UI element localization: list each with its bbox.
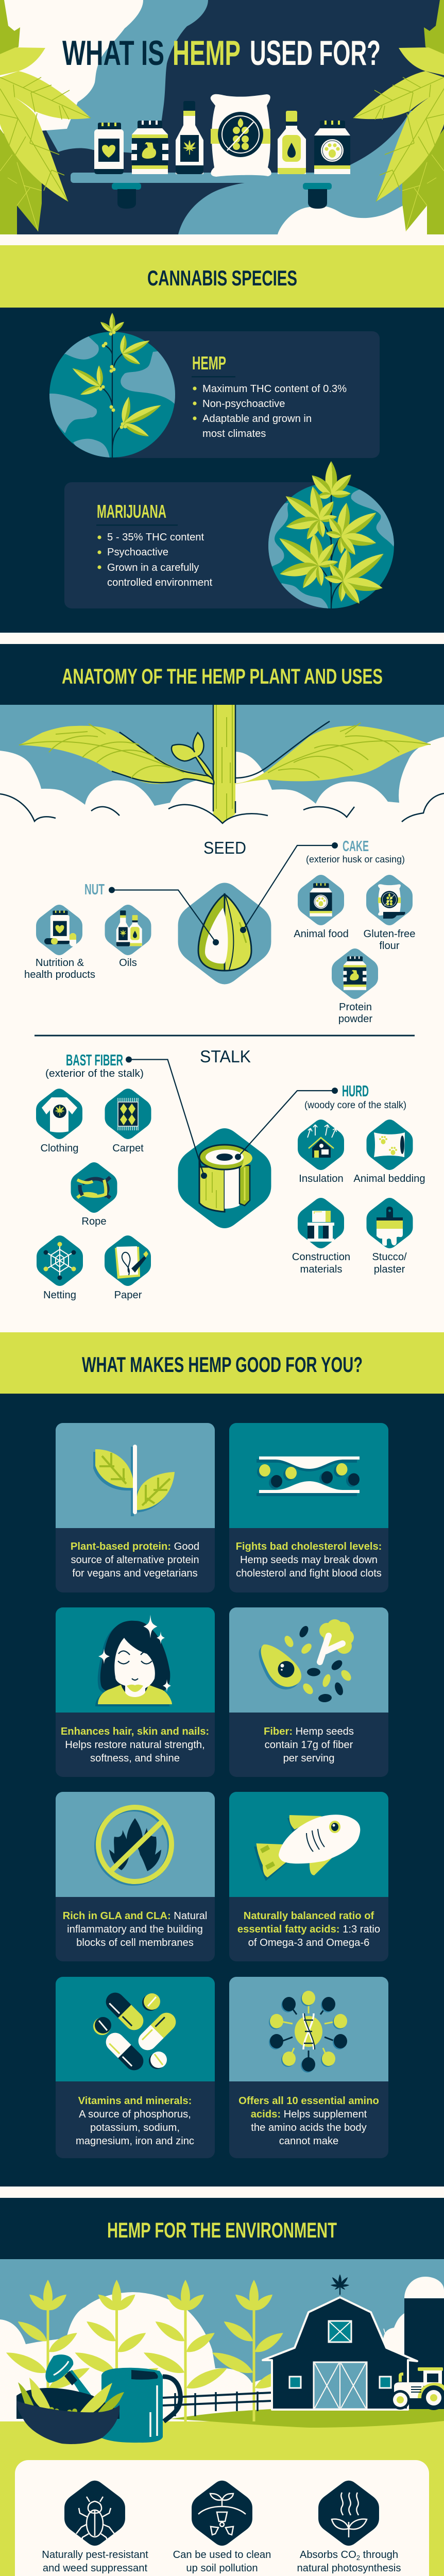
card: fatty acids: Naturally balanced ratio of [244, 1910, 374, 1922]
shelf [71, 173, 372, 209]
hemp plant illustration [49, 313, 175, 457]
marijuana text: Grown in a carefully [107, 562, 199, 573]
benefit labels row 1 [42, 2549, 401, 2574]
label: hurd: (woody core of the stalk) [304, 1100, 406, 1111]
card: cholesterol: Fights bad cholesterol levels: [236, 1541, 382, 1552]
card: amino acids: the amino acids the body [251, 2122, 367, 2133]
benefit labels row 1: natural photosynthesis [297, 2563, 401, 2574]
big seed illustration [178, 883, 271, 984]
icon: leaves [93, 1445, 175, 1516]
label: construction materials: materials [300, 1264, 342, 1275]
label: oils: Oils [119, 957, 137, 969]
icon: carpet [105, 1089, 151, 1139]
label: cake [306, 838, 405, 865]
label: stucco: plaster [374, 1264, 405, 1275]
watering can [45, 2354, 180, 2443]
farm scene [0, 2274, 444, 2444]
label: clothing: Clothing [40, 1143, 79, 1154]
card: hair skin nails [56, 1607, 215, 1777]
label: protein powder: powder [338, 1013, 372, 1025]
pointer: hurd [235, 1088, 338, 1160]
label: rope: Rope [81, 1216, 107, 1227]
icon: no inflammation [97, 1807, 172, 1883]
card: cholesterol: cholesterol and fight blood clots [236, 1568, 382, 1579]
hero background blobs [0, 0, 444, 234]
marijuana text: Psychoactive [107, 547, 168, 558]
label: cake: CAKE [343, 838, 369, 855]
hemp text: Non-psychoactive [202, 398, 285, 410]
silo [383, 2277, 444, 2409]
card: GLA and CLA: blocks of cell membranes [76, 1937, 194, 1948]
tractor [390, 2367, 444, 2410]
big stalk illustration [178, 1128, 271, 1228]
mortar with leaves [16, 2378, 124, 2444]
benefit labels row 1: through [360, 2549, 398, 2561]
label: nut: NUT [84, 882, 105, 898]
clouds behind plant [0, 737, 444, 837]
icon: netting [37, 1235, 83, 1286]
icon: oils [105, 905, 151, 955]
hemp text [192, 352, 347, 439]
product: protein bottle [131, 121, 168, 174]
marijuana text: MARIJUANA [97, 501, 166, 522]
barn [263, 2274, 417, 2410]
card: vitamins and minerals: A source of phosphorus, [79, 2109, 191, 2120]
label: seed: SEED [203, 838, 246, 857]
label: stucco [372, 1251, 407, 1275]
icon: animal bedding [367, 1120, 413, 1170]
product: pet food bottle [314, 121, 350, 174]
card: GLA and CLA [56, 1792, 215, 1961]
label: nutrition [24, 957, 95, 980]
dark hill [170, 2409, 444, 2428]
icon: absorbs CO2 [318, 2481, 379, 2546]
icon: pills [93, 1989, 180, 2074]
pointer: bast fiber [126, 1056, 207, 1179]
title [62, 33, 381, 73]
panel: marijuana [64, 461, 402, 613]
label: insulation: Insulation [299, 1173, 344, 1184]
card: fatty acids: essential fatty acids: 1:3 ratio [237, 1924, 380, 1935]
title: HEMP [173, 33, 241, 73]
card: cholesterol [229, 1423, 388, 1592]
hemp text: HEMP [192, 352, 226, 374]
marijuana text: 5 - 35% THC content [107, 532, 204, 543]
card: vitamins and minerals: potassium, sodium, [90, 2122, 180, 2133]
icon: pest resistant [64, 2481, 125, 2546]
card: vitamins and minerals: Vitamins and minerals: [78, 2095, 192, 2107]
benefit labels row 1: and weed suppressant [43, 2563, 147, 2574]
hemp leaves right [353, 0, 444, 234]
label: cake: (exterior husk or casing) [306, 854, 405, 865]
icon: paper [105, 1235, 151, 1286]
pointer: nut [109, 887, 219, 945]
label: bast fiber [45, 1051, 144, 1079]
card: fatty acids [229, 1792, 388, 1961]
benefit labels row 1: Can be used to clean [173, 2549, 271, 2561]
icon: protein powder [332, 948, 378, 999]
icon: gluten-free flour [366, 875, 413, 925]
heading: cannabis species: CANNABIS SPECIES [147, 266, 297, 290]
hemp text: most climates [202, 428, 266, 439]
icon: stucco [367, 1198, 413, 1248]
card: amino acids [229, 1977, 388, 2158]
product: supplement bottle with heart [94, 123, 124, 174]
icon: rope [71, 1162, 117, 1213]
label: stalk: STALK [200, 1047, 251, 1066]
benefit labels row 1: 2 [356, 2554, 360, 2562]
card: vitamins and minerals [56, 1977, 215, 2158]
card: GLA and CLA: inflammatory and the building [67, 1924, 203, 1935]
card: cholesterol: Hemp seeds may break down [240, 1554, 378, 1566]
label: animal food: Animal food [294, 928, 349, 940]
icon: clean soil [192, 2481, 252, 2546]
panel: environment benefits [15, 2460, 429, 2576]
icon: clothing [36, 1089, 82, 1139]
benefit labels row 1: Naturally pest-resistant [42, 2549, 148, 2561]
icon: fish [254, 1815, 360, 1881]
label: nutrition: Nutrition & [36, 957, 84, 969]
card: amino acids: cannot make [279, 2136, 338, 2147]
icon: artery [257, 1456, 360, 1496]
icon: woman [95, 1615, 172, 1706]
marijuana plant illustration [268, 461, 394, 608]
fence [163, 2392, 272, 2416]
hemp stalks [4, 2280, 298, 2421]
pointer: cake [240, 842, 338, 933]
card: fiber: Fiber: Hemp seeds [264, 1726, 354, 1737]
label: bast fiber: (exterior of the stalk) [45, 1068, 144, 1079]
product: hemp bottle [176, 101, 203, 174]
icon: DNA with amino acids [269, 1991, 347, 2073]
card: plant-based protein: Plant-based protein: Good [71, 1541, 199, 1552]
label: gluten-free flour: flour [379, 940, 400, 952]
benefit labels row 1: Absorbs CO [300, 2549, 356, 2561]
label: hurd [304, 1082, 406, 1111]
heading: hemp for the environment: HEMP FOR THE ENVIRONMENT [107, 2218, 337, 2242]
label: gluten-free flour [364, 928, 415, 952]
marijuana text [96, 501, 213, 588]
icon: insulation [298, 1120, 344, 1170]
label: protein powder: Protein [339, 1002, 372, 1013]
card: fatty acids: of Omega-3 and Omega-6 [248, 1937, 369, 1948]
card: hair skin nails: softness, and shine [90, 1753, 180, 1764]
icon: animal food [298, 875, 344, 925]
title: WHAT IS [62, 33, 164, 73]
card: fiber: contain 17g of fiber [265, 1739, 353, 1751]
icon: fiber foods [259, 1619, 354, 1703]
hemp text: Maximum THC content of 0.3% [202, 383, 347, 395]
icon: construction materials [298, 1198, 344, 1248]
card: plant-based protein: source of alternative protein [71, 1554, 199, 1566]
product: gluten-free flour bag [211, 94, 271, 177]
card: plant-based protein: for vegans and vegetarians [72, 1568, 198, 1579]
label: nutrition: health products [24, 969, 95, 980]
label: construction materials [292, 1251, 350, 1275]
clouds [0, 2292, 272, 2421]
card: amino acids: Offers all 10 essential amino [238, 2095, 379, 2107]
label: carpet: Carpet [112, 1143, 144, 1154]
card: fiber [229, 1607, 388, 1777]
label: construction materials: Construction [292, 1251, 350, 1263]
card: fiber: per serving [283, 1753, 334, 1764]
marijuana text: controlled environment [107, 577, 213, 588]
label: animal bedding: Animal bedding [353, 1173, 425, 1184]
card: amino acids: acids: Helps supplement [251, 2109, 367, 2120]
card: vitamins and minerals: magnesium, iron and zinc [76, 2136, 194, 2147]
card: hair skin nails: Enhances hair, skin and nails: [61, 1726, 209, 1737]
card: plant-based protein [56, 1423, 215, 1592]
hemp leaves left [0, 0, 91, 234]
label: bast fiber: BAST FIBER [66, 1051, 123, 1069]
benefit labels row 1: up soil pollution [186, 2563, 258, 2574]
card: hair skin nails: Helps restore natural strength, [65, 1739, 205, 1751]
label: stucco: Stucco/ [372, 1251, 407, 1263]
label: hurd: HURD [342, 1082, 369, 1100]
label: netting: Netting [43, 1290, 76, 1301]
panel: hemp [46, 313, 380, 461]
product: oil bottle [278, 111, 306, 174]
card: GLA and CLA: Rich in GLA and CLA: Natural [63, 1910, 207, 1922]
label: protein powder [338, 1002, 372, 1025]
hemp plant stem and leaves [19, 705, 431, 823]
hemp text: Adaptable and grown in [202, 413, 312, 425]
label: gluten-free flour: Gluten-free [364, 928, 415, 940]
label: paper: Paper [114, 1290, 142, 1301]
icon: nutrition [36, 905, 82, 955]
cloud outlines [0, 793, 444, 823]
